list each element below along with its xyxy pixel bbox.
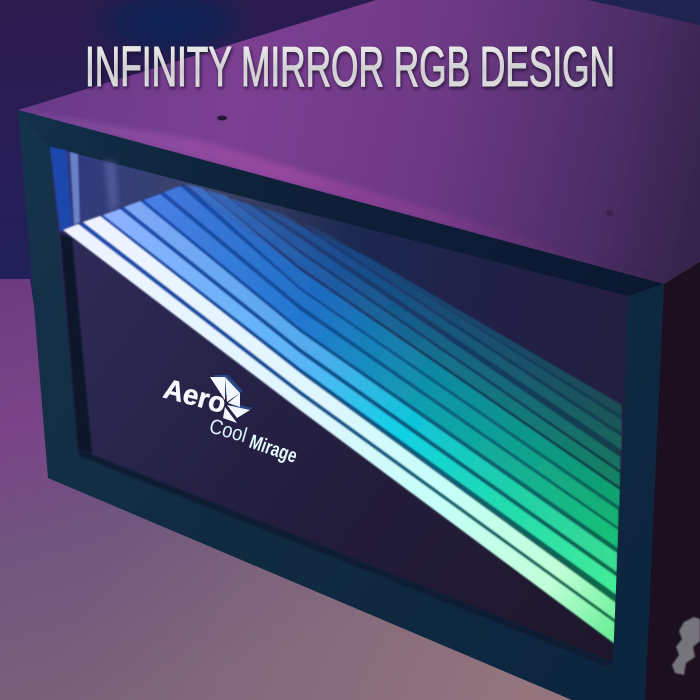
Mirage wordmark: Mirage [246,431,300,468]
top-right dark wall corner [585,0,700,25]
power supply top face [18,0,700,284]
power supply side face [645,262,700,700]
screw hole left [217,116,227,120]
blue wall glow [85,0,255,62]
AeroCool Mirage logo [160,373,300,468]
dark inner bottom edge [78,449,613,666]
logo shadow [213,375,253,416]
screw hole right [606,210,614,216]
front frame [18,110,664,700]
Aero wordmark: Aero [160,373,229,419]
table front highlight [0,478,572,700]
dark inner left edge [60,233,92,454]
Cool wordmark: Cool [207,415,249,447]
side logo blotch [672,617,700,675]
mirror panel [50,147,628,666]
mid bands [103,201,617,595]
upper glass reflection [50,147,628,470]
pale reflection strip two [104,160,118,212]
left blue reflection strip [50,147,72,232]
band underlay near [63,185,620,644]
lit strip along front top edge [18,110,664,284]
table surface [0,279,570,700]
upper frame rail [18,110,664,296]
fan icon [210,377,250,423]
background wall [0,0,700,290]
pale reflection strip [70,152,80,225]
faded far bands [144,184,622,548]
band underlay far [183,185,622,507]
brightest bands [63,216,616,644]
infinity light bands [63,184,622,644]
